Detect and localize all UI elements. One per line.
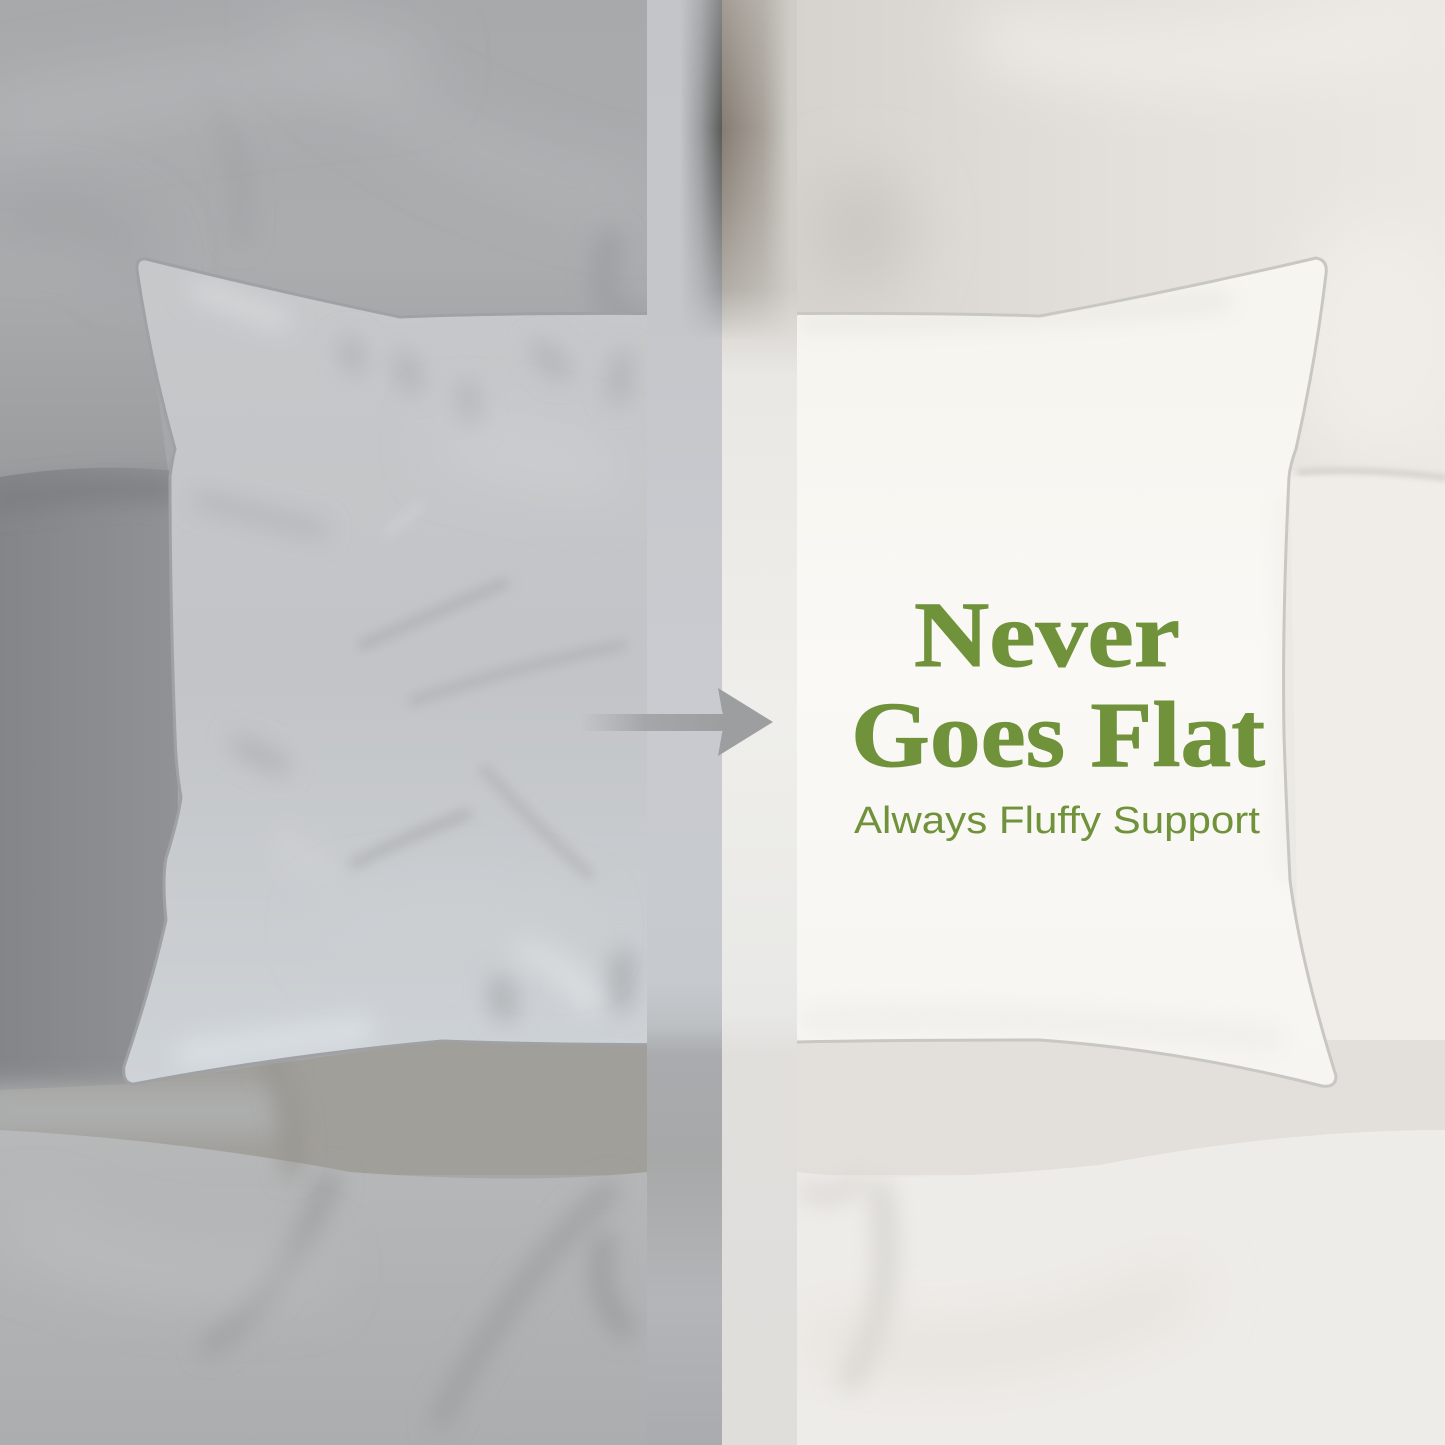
heading: Never Goes Flat: Never	[914, 584, 1180, 687]
center frosted band, right half	[722, 0, 797, 1445]
panel: after, warm white bedding	[797, 0, 1445, 1445]
subheading: Always Fluffy Support	[854, 800, 1260, 842]
panel: before, gray bedding	[0, 0, 647, 1445]
pillow: before side, wrinkled	[122, 258, 647, 1085]
mattress area, right	[1290, 474, 1445, 1120]
mattress area, left	[0, 468, 180, 1100]
background pillow, left	[0, 437, 168, 477]
arrow	[580, 688, 773, 756]
background pillow, right	[797, 0, 1160, 314]
heading: Never Goes Flat	[851, 584, 1265, 787]
heading: Never Goes Flat: Goes Flat	[851, 684, 1265, 787]
pillow: after side, plump	[797, 256, 1338, 1088]
blurred shadow in band	[680, 0, 790, 340]
center frosted band, left half	[647, 0, 722, 1445]
duvet, right	[797, 1130, 1445, 1175]
duvet, left	[0, 1130, 647, 1390]
